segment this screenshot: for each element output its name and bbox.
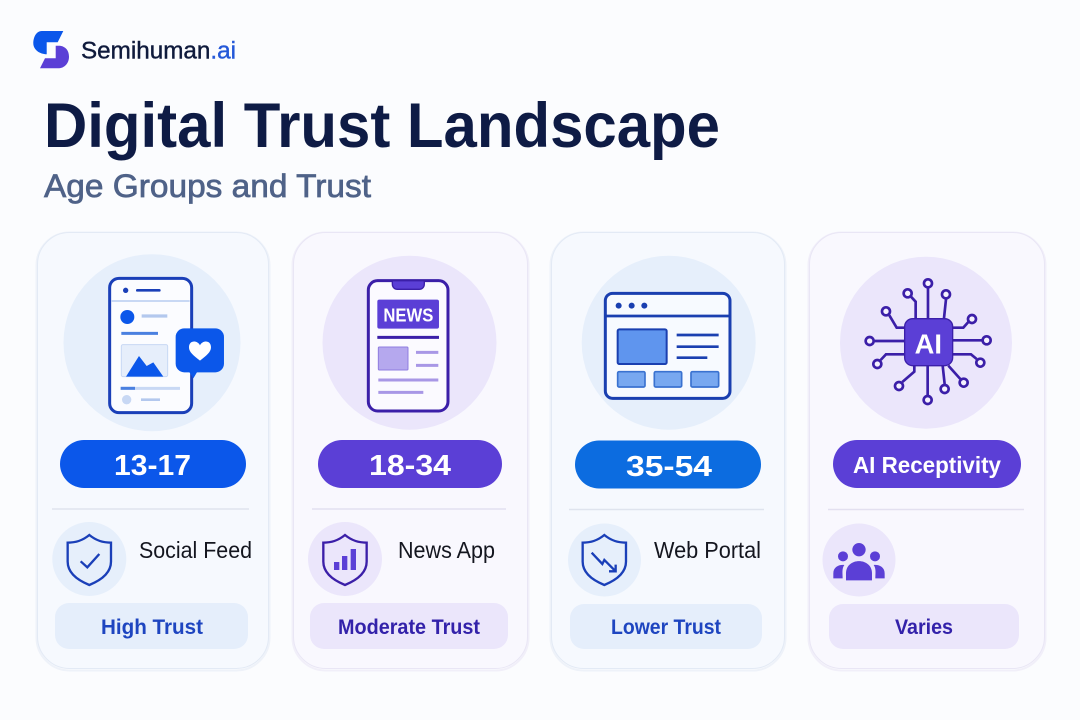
icon: logo mark <box>33 31 69 68</box>
badge: High Trust: High Trust <box>101 616 203 639</box>
pill: age 18-34: 18-34 <box>369 450 451 482</box>
logo: Semihuman.ai <box>33 31 236 68</box>
badge: Moderate Trust: Moderate Trust <box>338 616 480 639</box>
panel: 13-17 <box>36 232 270 670</box>
icon: AI chip: AI <box>915 328 942 359</box>
pill: age 18-34 <box>318 440 502 488</box>
pill: AI Receptivity <box>833 440 1021 488</box>
icon: web portal browser <box>582 256 756 430</box>
badge: Moderate Trust <box>310 603 508 649</box>
pill: AI Receptivity: AI Receptivity <box>853 452 1001 478</box>
title: Digital Trust Landscape <box>44 91 720 161</box>
icon: social feed phone <box>64 254 240 431</box>
label: Social Feed: Social Feed <box>139 537 252 563</box>
badge: Varies: Varies <box>895 616 953 639</box>
label: Web Portal: Web Portal <box>654 537 761 563</box>
logo wordmark: Semihuman.ai <box>81 38 236 64</box>
icon: shield with down arrow <box>568 524 641 596</box>
panel: AI Receptivity <box>808 232 1046 670</box>
icon: news app phone <box>322 256 496 430</box>
icon: news app phone: NEWS <box>383 305 433 326</box>
pill: age 35-54: 35-54 <box>626 451 712 483</box>
panel: 18-34 <box>292 232 528 670</box>
badge: Lower Trust: Lower Trust <box>611 616 721 639</box>
icon: people group <box>822 524 896 596</box>
icon: AI chip <box>840 257 1012 429</box>
icon: shield with check <box>52 522 126 596</box>
pill: age 13-17: 13-17 <box>114 450 191 482</box>
label: News App: News App <box>398 537 495 563</box>
pill: age 13-17 <box>60 440 246 488</box>
badge: Varies <box>829 604 1019 649</box>
icon: shield with bars <box>308 522 382 596</box>
pill: age 35-54 <box>575 440 761 488</box>
subtitle: Age Groups and Trust <box>44 168 371 204</box>
badge: High Trust <box>55 603 248 649</box>
panel: 35-54 <box>550 232 786 670</box>
badge: Lower Trust <box>570 604 762 649</box>
